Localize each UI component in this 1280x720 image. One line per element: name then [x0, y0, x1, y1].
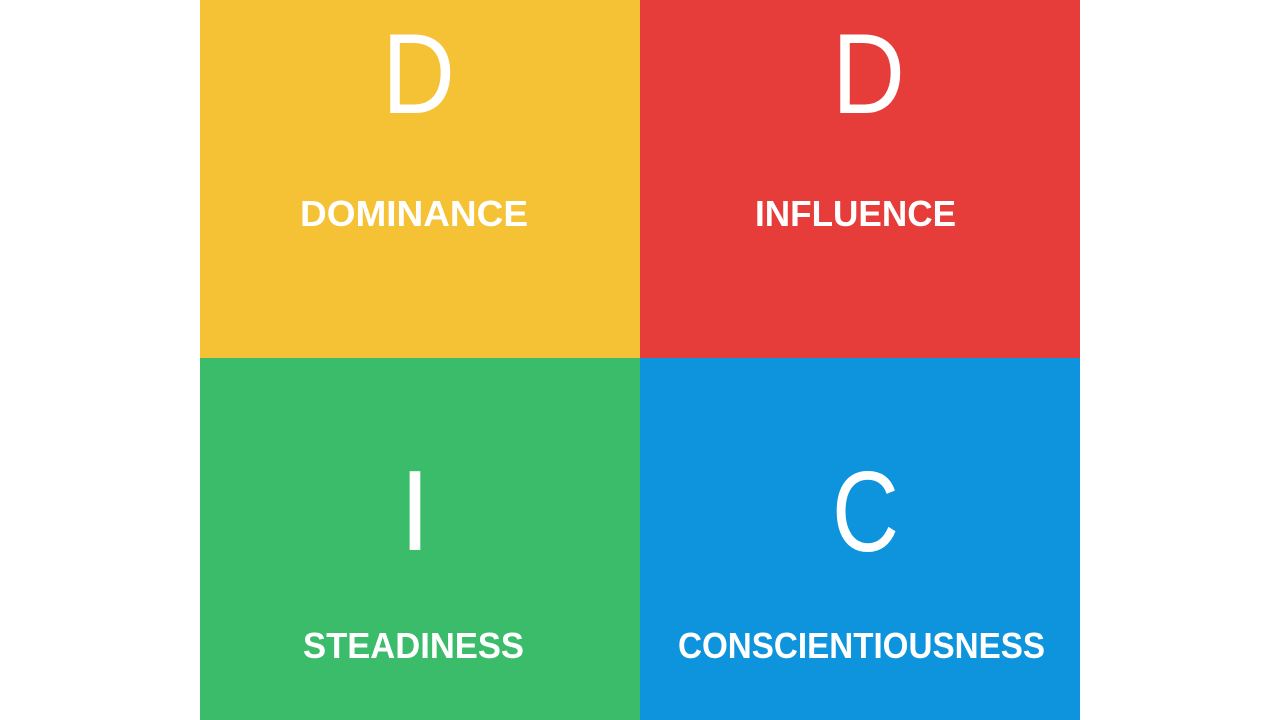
letter C: C: [832, 449, 899, 576]
panel: conscientiousness: [640, 358, 1080, 720]
label: influence: INFLUENCE: [755, 193, 956, 234]
label: dominance: DOMINANCE: [300, 193, 528, 234]
panel: steadiness: [200, 358, 640, 720]
letter D: D: [382, 11, 455, 138]
panel: influence: [640, 0, 1080, 358]
letter D: D: [832, 11, 905, 138]
panel: dominance: [200, 0, 640, 358]
letter I: I: [399, 448, 431, 575]
label: steadiness: STEADINESS: [303, 625, 524, 666]
label: conscientiousness: CONSCIENTIOUSNESS: [678, 625, 1045, 666]
